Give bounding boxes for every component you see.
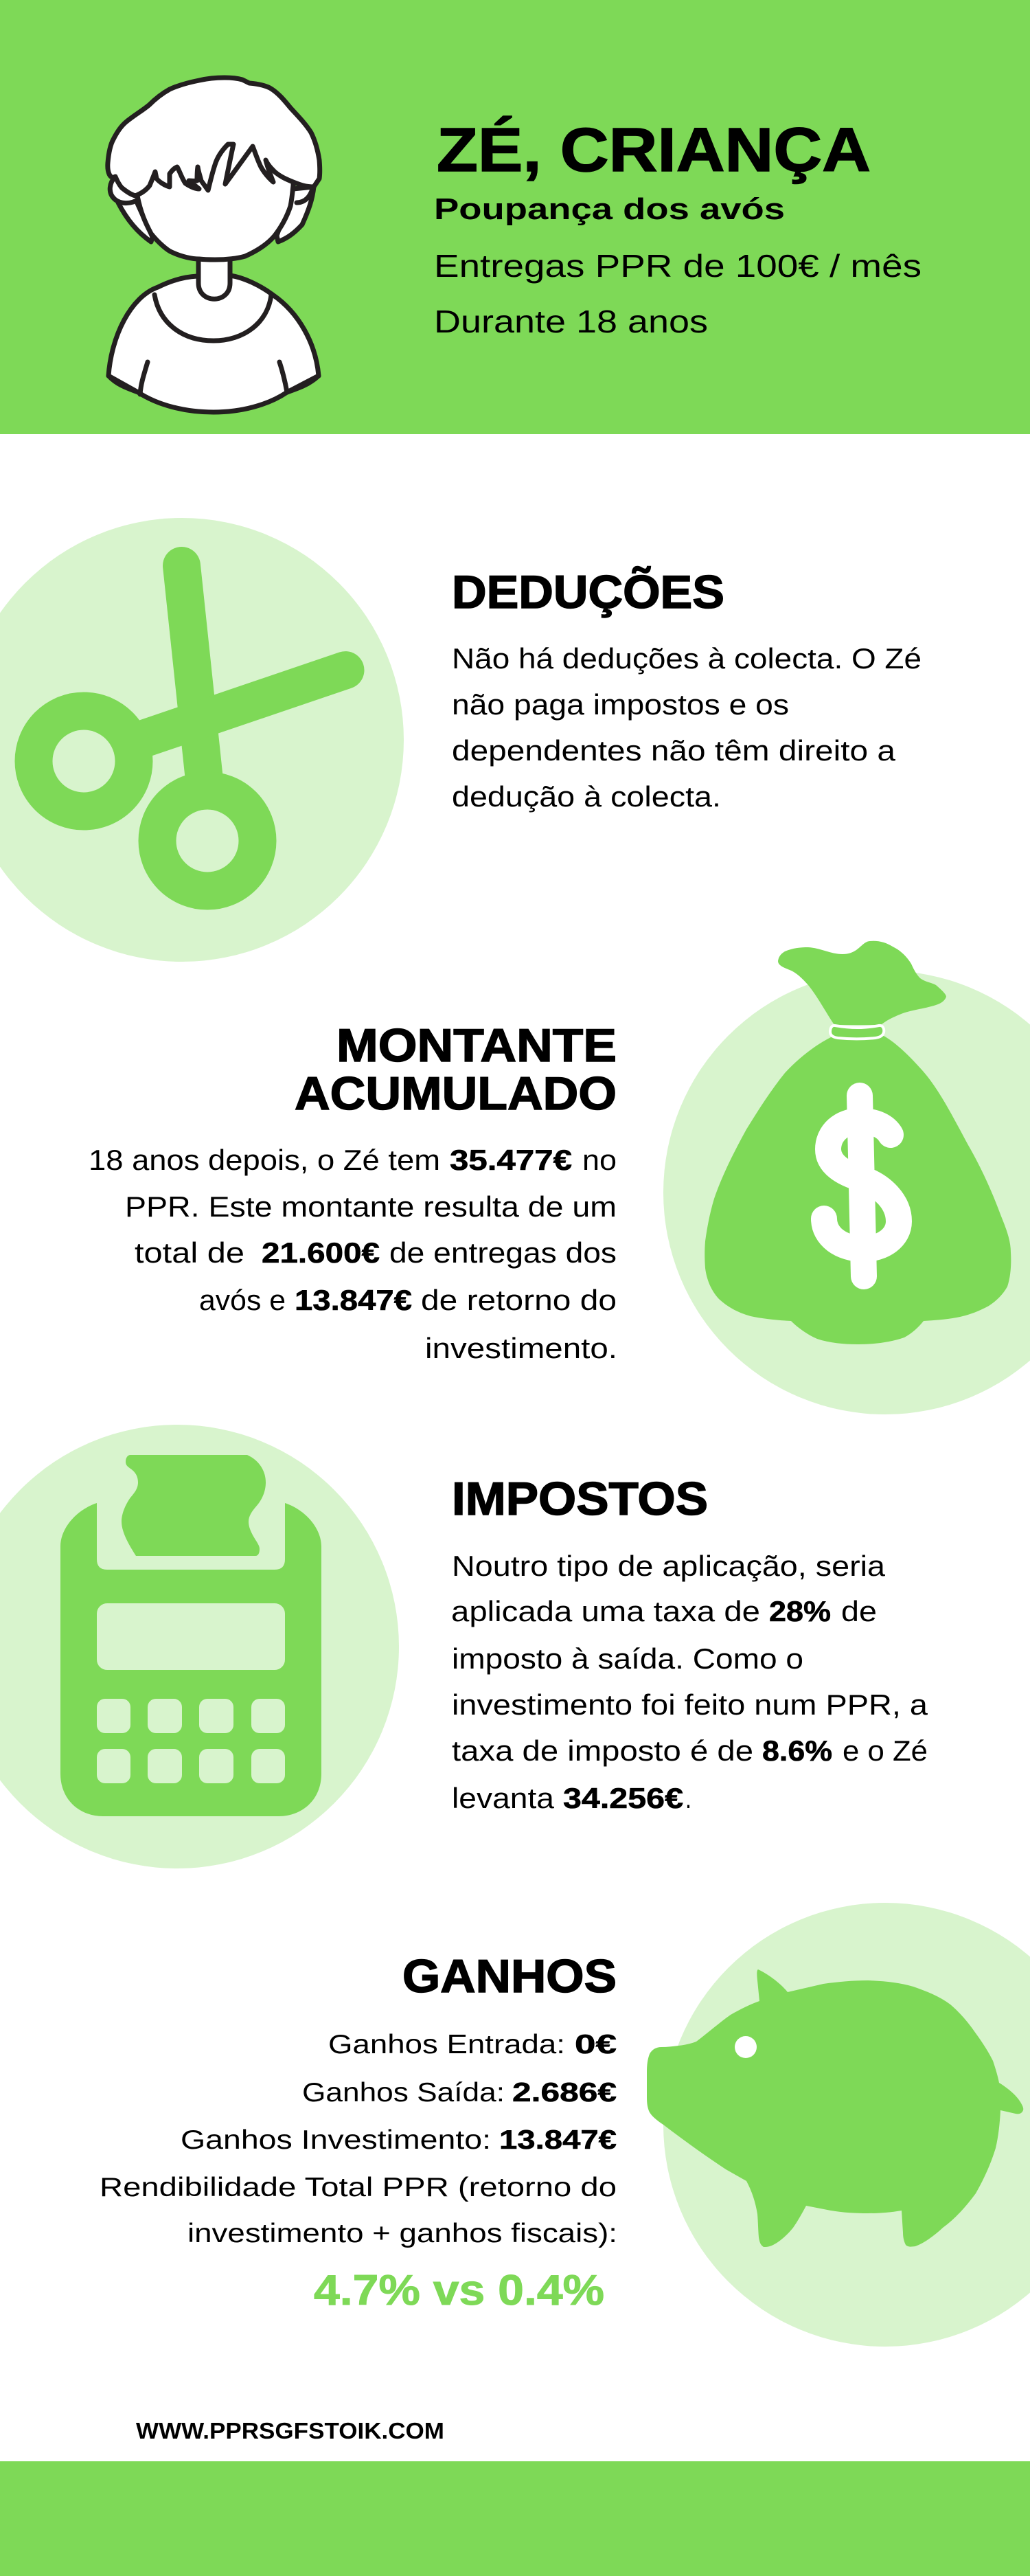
gains list: investimento + ganhos fiscais): <box>187 2219 617 2248</box>
icon: child portrait <box>108 78 320 412</box>
gains list: Ganhos Saída: <box>302 2078 505 2108</box>
text: duration: Durante 18 anos <box>434 304 708 339</box>
body text: dedução à colecta. <box>452 780 721 813</box>
icon: money bag <box>705 941 1011 1344</box>
heading: DEDUÇÕES <box>452 565 724 618</box>
footer band <box>0 2461 1030 2576</box>
circle background <box>0 518 404 962</box>
circle background <box>0 1425 399 1868</box>
panel: deduções <box>0 518 922 962</box>
icon: scissors <box>34 566 345 891</box>
body text <box>89 1144 617 1364</box>
body text: e o Zé <box>843 1735 928 1767</box>
body text: 18 anos depois, o Zé tem <box>89 1144 440 1176</box>
body text: de retorno do <box>421 1284 617 1316</box>
body text: total de <box>135 1236 244 1269</box>
body text: 28% <box>769 1595 831 1627</box>
body text <box>452 642 922 813</box>
body text: 8.6% <box>762 1735 832 1767</box>
gains list: Ganhos Entrada: <box>328 2030 565 2059</box>
body text: PPR. Este montante resulta de um <box>125 1190 617 1223</box>
heading: GANHOS <box>402 1950 617 2002</box>
gains list: 0€ <box>575 2030 617 2059</box>
gains list <box>100 2030 617 2248</box>
body text: Noutro tipo de aplicação, seria <box>452 1550 886 1582</box>
body text: investimento foi feito num PPR, a <box>452 1688 928 1721</box>
gains list: 2.686€ <box>512 2078 617 2108</box>
body text: 34.256€ <box>563 1782 683 1814</box>
body text: dependentes não têm direito a <box>452 734 896 767</box>
body text: levanta <box>452 1782 555 1814</box>
body text: investimento. <box>425 1332 617 1364</box>
body text: de entregas dos <box>389 1236 617 1269</box>
body text: avós e <box>199 1284 286 1316</box>
body text: imposto à saída. Como o <box>452 1642 803 1675</box>
heading: MONTANTE <box>336 1019 617 1072</box>
body text: 21.600€ <box>262 1236 380 1269</box>
body text: aplicada uma taxa de <box>451 1595 760 1627</box>
body text: taxa de imposto é de <box>452 1735 753 1767</box>
body text: não paga impostos e os <box>452 688 789 721</box>
heading <box>295 1019 617 1120</box>
heading: IMPOSTOS <box>452 1473 708 1525</box>
icon: piggy bank <box>647 1969 1023 2247</box>
subtitle: Poupança dos avós <box>434 192 785 226</box>
highlighted return comparison: 4.7% vs 0.4% <box>314 2267 604 2314</box>
circle background <box>663 971 1030 1414</box>
body text: no <box>582 1144 617 1176</box>
gains list: Rendibilidade Total PPR (retorno do <box>100 2173 617 2202</box>
body text: 35.477€ <box>450 1144 572 1176</box>
panel: ganhos <box>100 1903 1030 2347</box>
body text: 13.847€ <box>295 1284 412 1316</box>
gains list: Ganhos Investimento: <box>181 2125 491 2155</box>
heading: ACUMULADO <box>295 1067 617 1120</box>
title: ZÉ, CRIANÇA <box>437 115 871 185</box>
panel: montante acumulado <box>89 941 1030 1414</box>
body text: de <box>841 1595 877 1627</box>
website link: WWW.PPRSGFSTOIK.COM <box>136 2418 444 2443</box>
circle background <box>663 1903 1030 2347</box>
body text <box>451 1550 928 1814</box>
text: monthly contribution: Entregas PPR de 100€ / mês <box>434 248 922 284</box>
panel: header <box>0 0 1030 434</box>
header background band <box>0 0 1030 434</box>
icon: calculator <box>60 1455 321 1816</box>
body text: Não há deduções à colecta. O Zé <box>452 642 922 675</box>
gains list: 13.847€ <box>499 2125 617 2155</box>
panel: impostos <box>0 1425 928 1868</box>
body text: . <box>685 1782 691 1814</box>
